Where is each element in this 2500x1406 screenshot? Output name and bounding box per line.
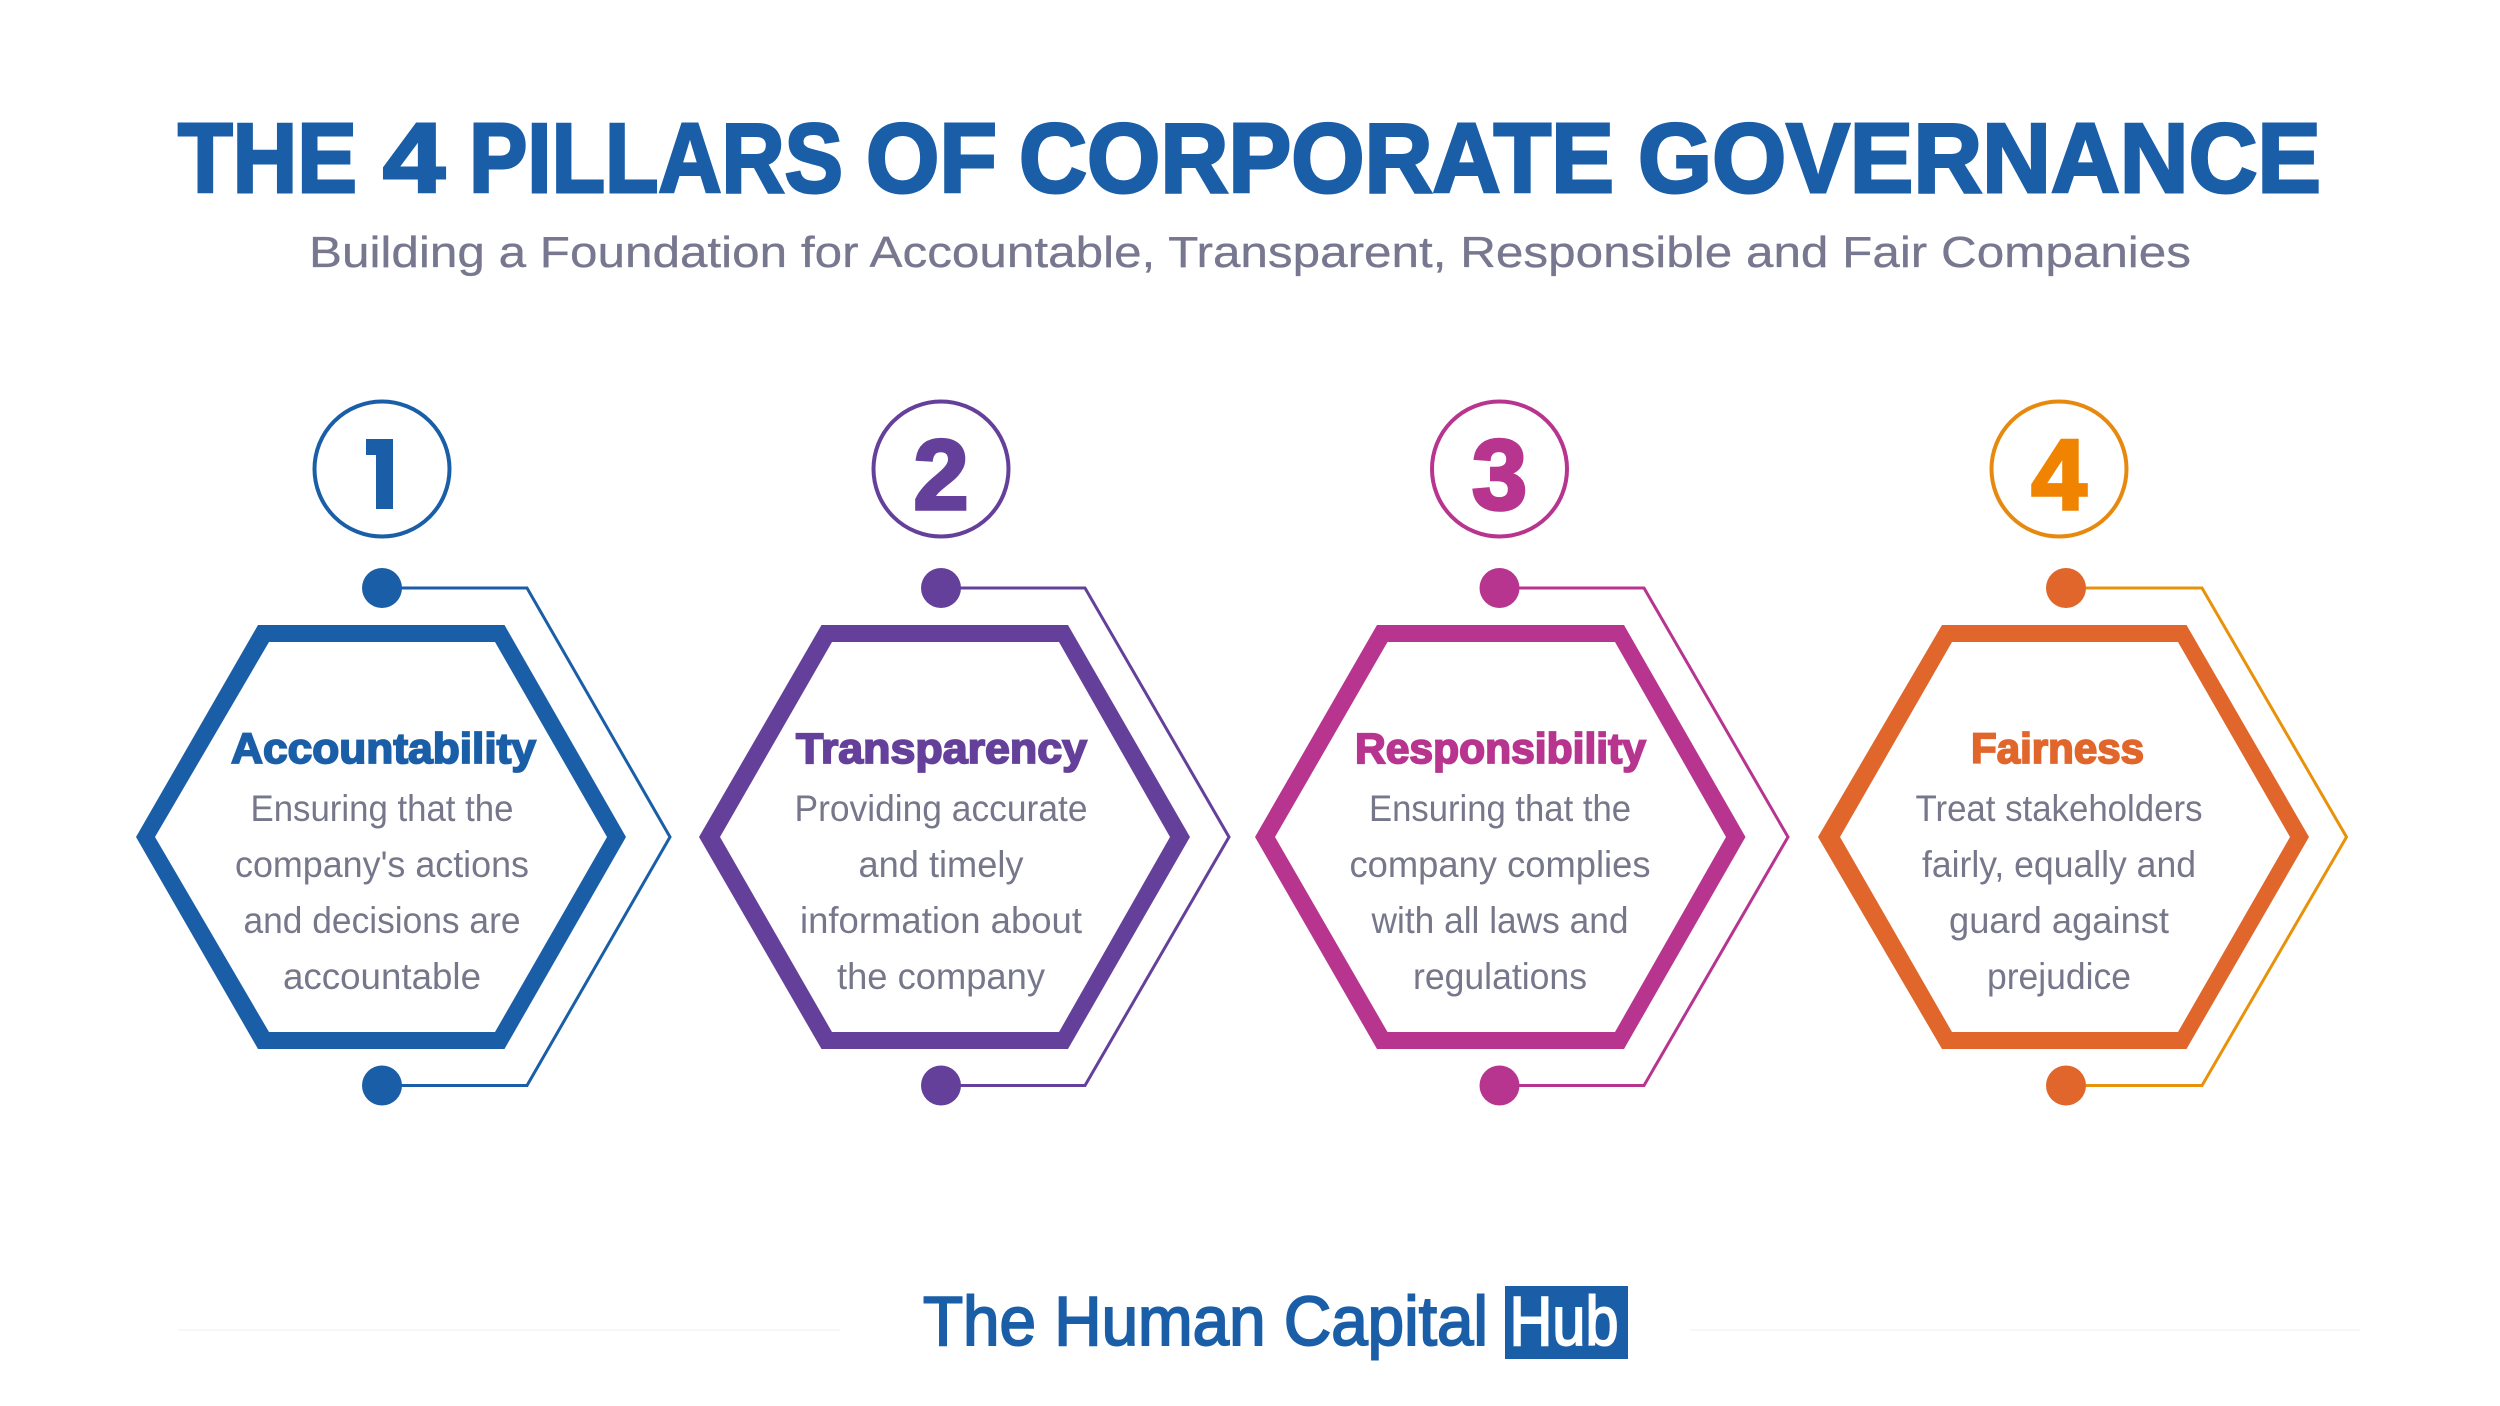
title: OF bbox=[866, 103, 997, 213]
description bbox=[1350, 788, 1650, 997]
title bbox=[178, 103, 2321, 213]
description: with all laws and bbox=[1371, 900, 1628, 941]
number badge 3: 3 bbox=[1472, 419, 1527, 530]
description: prejudice bbox=[1987, 956, 2131, 997]
title: THE bbox=[178, 103, 357, 213]
connector line with dots bbox=[2046, 568, 2346, 1106]
description: regulations bbox=[1413, 956, 1587, 997]
hexagon frame bbox=[1255, 625, 1746, 1049]
description: Providing accurate bbox=[794, 788, 1088, 829]
description: and decisions are bbox=[244, 900, 520, 941]
number badge 4 bbox=[1992, 402, 2126, 536]
number badge 1: 1 bbox=[356, 419, 412, 530]
number badge 3 bbox=[1432, 402, 1567, 536]
panel: transparency bbox=[699, 402, 1229, 1106]
description: the company bbox=[837, 956, 1045, 997]
panel: fairness bbox=[1818, 402, 2346, 1106]
description bbox=[1916, 788, 2202, 997]
hexagon frame bbox=[1818, 625, 2309, 1049]
title: PILLARS bbox=[469, 103, 843, 213]
description: Ensuring that the bbox=[250, 788, 514, 829]
logo wordmark: The Human Capital bbox=[923, 1282, 1488, 1360]
description bbox=[235, 788, 529, 997]
title: CORPORATE bbox=[1019, 103, 1614, 213]
connector line with dots bbox=[921, 568, 1229, 1106]
panel: accountability bbox=[136, 402, 670, 1106]
hexagon frame bbox=[699, 625, 1190, 1049]
description: fairly, equally and bbox=[1922, 844, 2196, 885]
number badge 1 bbox=[314, 402, 450, 536]
logo badge: Hub bbox=[1510, 1282, 1618, 1360]
number badge 2: 2 bbox=[913, 419, 969, 530]
description: accountable bbox=[283, 956, 481, 997]
description: and timely bbox=[858, 844, 1024, 885]
logo: The Human Capital Hub bbox=[923, 1282, 1628, 1360]
number badge 4: 4 bbox=[2031, 419, 2087, 530]
subtitle: Building a Foundation for Accountable, Transparent, Responsible and Fair Companies bbox=[309, 228, 2191, 277]
heading: Accountability bbox=[231, 725, 536, 773]
heading: Responsibility bbox=[1355, 725, 1646, 773]
description: Ensuring that the bbox=[1369, 788, 1631, 829]
title: GOVERNANCE bbox=[1638, 103, 2321, 213]
connector line with dots bbox=[362, 568, 670, 1106]
description: Treat stakeholders bbox=[1916, 788, 2202, 829]
description: information about bbox=[800, 900, 1083, 941]
description bbox=[794, 788, 1088, 997]
hexagon frame bbox=[136, 625, 626, 1049]
connector line with dots bbox=[1480, 568, 1788, 1106]
description: company's actions bbox=[235, 844, 529, 885]
description: guard against bbox=[1949, 900, 2170, 941]
panel: responsibility bbox=[1255, 402, 1788, 1106]
heading: Fairness bbox=[1971, 725, 2144, 773]
title: 4 bbox=[383, 103, 445, 213]
description: company complies bbox=[1350, 844, 1650, 885]
heading: Transparency bbox=[796, 725, 1087, 773]
number badge 2 bbox=[874, 402, 1008, 536]
